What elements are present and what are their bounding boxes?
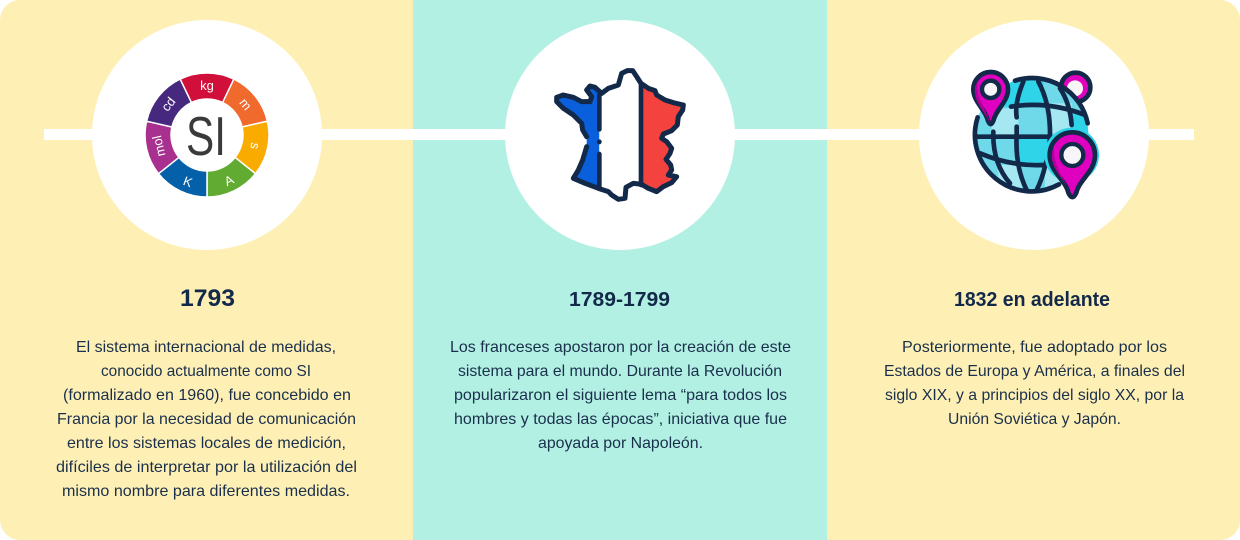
text block: 1832 en adelante xyxy=(884,339,1185,428)
text block: 1793: conocido actualmente como SI xyxy=(101,363,311,380)
icon: globe with location pins xyxy=(971,70,1099,200)
heading: 1832 en adelante: 1832 en adelante xyxy=(954,289,1110,311)
text block: 1832 en adelante: Posteriormente, fue adoptado por los xyxy=(902,339,1167,356)
icon: SI units wheel: K xyxy=(181,173,195,190)
timeline circle 3 xyxy=(919,20,1149,250)
icon: map of France in tricolour xyxy=(554,68,686,202)
text block: 1789-1799 xyxy=(450,339,791,452)
icon: SI units wheel: A xyxy=(222,172,236,189)
text block: 1789-1799: sistema para el mundo. Durante la Revolución xyxy=(458,363,782,380)
icon: SI units wheel xyxy=(145,73,269,197)
icon: SI units wheel: cd xyxy=(158,94,178,114)
panel: background 1793 xyxy=(0,0,413,540)
timeline circle 2 xyxy=(505,20,735,250)
panel: background 1789-1799 xyxy=(413,0,827,540)
text block: 1793: (formalizado en 1960), fue concebido en xyxy=(63,387,351,404)
icon: SI units wheel: m xyxy=(236,95,255,113)
icon: SI units wheel: s xyxy=(247,141,263,151)
text block: 1789-1799: hombres y todas las épocas”, iniciativa que fue xyxy=(454,411,787,428)
text block: 1793: difíciles de interpretar por la utilización del xyxy=(56,459,357,476)
icon: SI units wheel: mol xyxy=(149,134,168,158)
text block: 1793: El sistema internacional de medidas, xyxy=(76,339,336,356)
text block: 1789-1799: Los franceses apostaron por la creación de este xyxy=(450,339,791,356)
timeline bar xyxy=(44,129,1194,140)
heading: 1789-1799: 1789-1799 xyxy=(569,289,670,311)
icon: SI units wheel: SI xyxy=(186,105,226,167)
text block: 1789-1799: popularizaron el siguiente lema “para todos los xyxy=(454,387,787,404)
text block: 1793 xyxy=(56,339,357,500)
heading: 1793: 1793 xyxy=(180,285,235,312)
text block: 1793: entre los sistemas locales de medición, xyxy=(67,435,346,452)
text block: 1832 en adelante: siglo XIX, y a principios del siglo XX, por la xyxy=(885,387,1184,404)
panel: background 1832 en adelante xyxy=(827,0,1240,540)
text block: 1789-1799: apoyada por Napoleón. xyxy=(538,435,703,452)
text block: 1793: mismo nombre para diferentes medidas. xyxy=(62,483,350,500)
icon: SI units wheel: kg xyxy=(200,78,214,93)
timeline circle 1 xyxy=(92,20,322,250)
text block: 1793: Francia por la necesidad de comunicación xyxy=(57,411,356,428)
text block: 1832 en adelante: Estados de Europa y América, a finales del xyxy=(884,363,1185,380)
text block: 1832 en adelante: Unión Soviética y Japón. xyxy=(948,411,1121,428)
